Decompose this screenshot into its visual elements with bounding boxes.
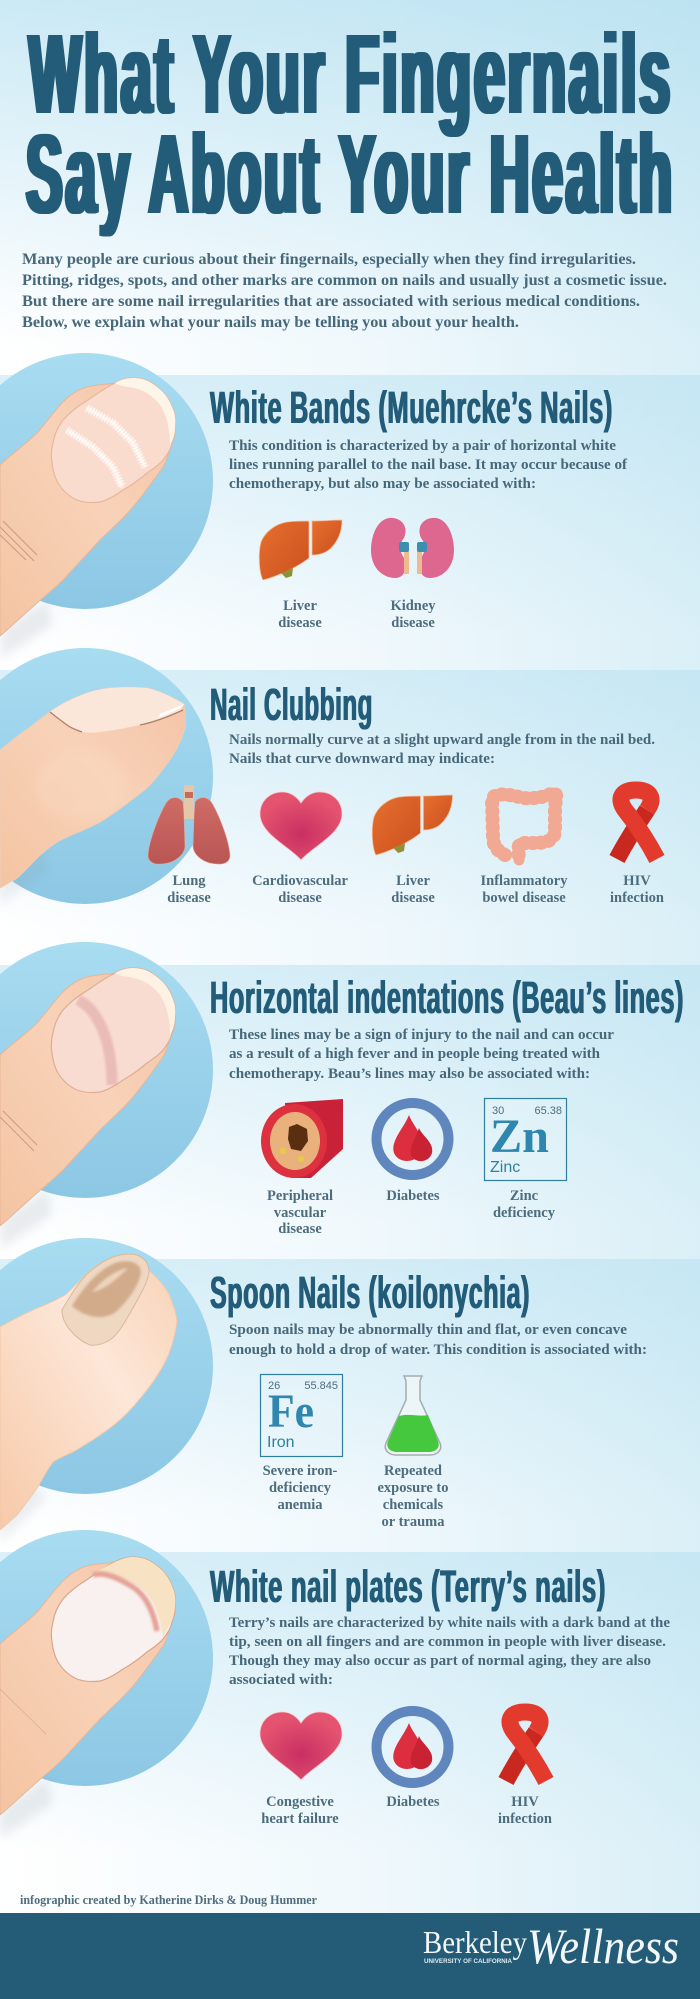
label: inflammatory bowel disease xyxy=(480,873,568,906)
panel: nail clubbing xyxy=(0,648,700,930)
description xyxy=(229,1027,615,1082)
label: liver disease xyxy=(391,873,435,906)
icon: diabetes xyxy=(376,1711,448,1783)
icon: artery xyxy=(261,1099,343,1178)
intro text: Many people are curious about their fingernails, especially when they find irregularities. xyxy=(22,251,636,268)
intro text: Pitting, ridges, spots, and other marks are common on nails and usually just a cosmetic issue. xyxy=(22,272,667,289)
label: kidney disease: Kidney xyxy=(390,598,436,614)
title xyxy=(26,11,675,237)
intro text: But there are some nail irregularities that are associated with serious medical conditions. xyxy=(22,293,640,310)
logo: Berkeley Wellness xyxy=(423,1918,679,1974)
illustration: clubbed finger xyxy=(0,687,185,905)
label: severe iron-deficiency anemia xyxy=(263,1463,338,1513)
icon: zinc element: Zinc xyxy=(490,1159,520,1176)
label: congestive heart failure xyxy=(261,1794,339,1827)
label: hiv infection: HIV xyxy=(623,873,651,889)
icon: heart xyxy=(260,1712,342,1780)
label: kidney disease: disease xyxy=(391,615,435,631)
description: tip, seen on all fingers and are common in people with liver disease. xyxy=(229,1634,666,1650)
label: peripheral vascular disease: vascular xyxy=(274,1205,327,1221)
label: hiv infection: HIV xyxy=(511,1794,539,1810)
description: This condition is characterized by a pair of horizontal white xyxy=(229,438,617,454)
description xyxy=(229,1615,671,1688)
intro text: Below, we explain what your nails may be telling you about your health. xyxy=(22,314,519,331)
icon: iron element: 55.845 xyxy=(304,1380,338,1392)
label: congestive heart failure: Congestive xyxy=(266,1794,334,1810)
illustration: finger with spoon nail xyxy=(0,1254,177,1545)
description xyxy=(229,438,627,492)
label: cardiovascular disease: disease xyxy=(278,890,322,906)
icon: iron element xyxy=(260,1374,342,1456)
icon: zinc element: 65.38 xyxy=(534,1105,562,1117)
panel: beau's lines xyxy=(0,942,700,1250)
panel: spoon nails xyxy=(0,1238,700,1545)
icon: diabetes xyxy=(376,1103,448,1175)
label: liver disease: Liver xyxy=(283,598,317,614)
label: repeated exposure: Repeated xyxy=(384,1463,442,1479)
label: zinc deficiency xyxy=(493,1188,556,1221)
illustration: finger with indentation xyxy=(0,968,175,1250)
panel: white bands xyxy=(0,353,700,660)
footer bar xyxy=(0,1913,700,1999)
label: hiv infection xyxy=(498,1794,552,1827)
illustration: finger with white bands xyxy=(0,378,175,660)
icon: zinc element xyxy=(484,1098,566,1180)
logo: Berkeley Wellness: Berkeley xyxy=(423,1924,527,1960)
label: inflammatory bowel disease: Inflammatory xyxy=(480,873,568,889)
label: zinc deficiency: deficiency xyxy=(493,1205,556,1221)
label: diabetes: Diabetes xyxy=(386,1794,440,1810)
label: repeated exposure: exposure to xyxy=(377,1480,449,1496)
label: lung disease: Lung xyxy=(172,873,206,889)
label: liver disease: disease xyxy=(278,615,322,631)
icon: ribbon xyxy=(617,790,657,859)
icon: zinc element: Zn xyxy=(490,1110,549,1163)
label: severe iron-deficiency anemia: deficiency xyxy=(269,1480,332,1496)
label: liver disease: disease xyxy=(391,890,435,906)
label: hiv infection xyxy=(610,873,664,906)
label: lung disease xyxy=(167,873,211,906)
description: associated with: xyxy=(229,1672,333,1688)
description: Nails that curve downward may indicate: xyxy=(229,751,495,767)
icon: ribbon xyxy=(506,1712,546,1781)
icon: kidney xyxy=(371,518,454,578)
description: These lines may be a sign of injury to the nail and can occur xyxy=(229,1027,615,1043)
label: inflammatory bowel disease: bowel disease xyxy=(482,890,566,906)
label: liver disease xyxy=(278,598,322,631)
description: chemotherapy, but also may be associated with: xyxy=(229,476,536,492)
label: cardiovascular disease xyxy=(252,873,348,906)
label: kidney disease xyxy=(390,598,436,631)
icon: iron element: Iron xyxy=(267,1434,295,1451)
label: repeated exposure xyxy=(377,1463,449,1530)
heading: Nail Clubbing xyxy=(210,679,373,730)
label: peripheral vascular disease: disease xyxy=(278,1221,322,1237)
label: severe iron-deficiency anemia: anemia xyxy=(277,1497,323,1513)
intro text xyxy=(22,251,667,331)
label: peripheral vascular disease xyxy=(267,1188,333,1237)
label: peripheral vascular disease: Peripheral xyxy=(267,1188,333,1204)
illustration: finger with white nail xyxy=(0,1557,175,1839)
logo: Berkeley Wellness: Wellness xyxy=(527,1918,679,1974)
logo: Berkeley Wellness: UNIVERSITY OF CALIFORNIA xyxy=(424,1959,513,1965)
icon: iron element: 26 xyxy=(268,1380,280,1392)
icon: iron element: Fe xyxy=(268,1385,314,1438)
label: repeated exposure: chemicals xyxy=(383,1497,444,1513)
description xyxy=(229,1322,647,1358)
label: diabetes: Diabetes xyxy=(386,1188,440,1204)
label: hiv infection: infection xyxy=(498,1811,552,1827)
label: hiv infection: infection xyxy=(610,890,664,906)
panel: terry's nails xyxy=(0,1530,700,1852)
description: Spoon nails may be abnormally thin and flat, or even concave xyxy=(229,1322,628,1338)
label: lung disease: disease xyxy=(167,890,211,906)
description xyxy=(229,732,655,767)
description: Though they may also occur as part of normal aging, they are also xyxy=(229,1653,651,1669)
credit line: infographic created by Katherine Dirks & Doug Hummer xyxy=(20,1893,317,1907)
description: lines running parallel to the nail base. It may occur because of xyxy=(229,457,627,473)
description: chemotherapy. Beau’s lines may also be associated with: xyxy=(229,1066,590,1082)
icon: lungs xyxy=(148,785,230,864)
icon: heart xyxy=(260,792,342,860)
label: repeated exposure: or trauma xyxy=(382,1514,445,1530)
label: zinc deficiency: Zinc xyxy=(510,1188,539,1204)
label: cardiovascular disease: Cardiovascular xyxy=(252,873,348,889)
description: Terry’s nails are characterized by white nails with a dark band at the xyxy=(229,1615,671,1631)
label: congestive heart failure: heart failure xyxy=(261,1811,339,1827)
label: severe iron-deficiency anemia: Severe iron- xyxy=(263,1463,338,1479)
icon: liver xyxy=(259,520,342,580)
description: Nails normally curve at a slight upward angle from in the nail bed. xyxy=(229,732,655,748)
icon: flask xyxy=(385,1376,441,1455)
icon: zinc element: 30 xyxy=(492,1105,504,1117)
description: as a result of a high fever and in people being treated with xyxy=(229,1046,600,1062)
description: enough to hold a drop of water. This condition is associated with: xyxy=(229,1342,647,1358)
icon: liver xyxy=(372,795,453,855)
icon: colon xyxy=(492,793,556,860)
label: liver disease: Liver xyxy=(396,873,430,889)
